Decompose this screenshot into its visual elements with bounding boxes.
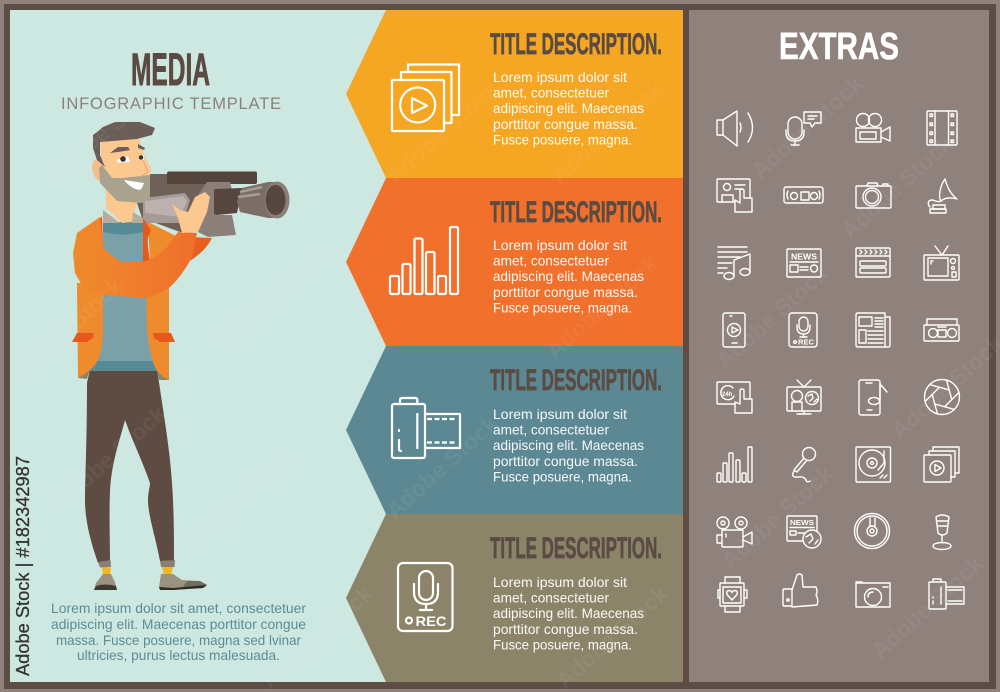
body text: Fusce posuere, magna. (493, 132, 632, 148)
body text: amet, consectetuer (493, 252, 609, 268)
arrow band (346, 346, 683, 514)
smile (124, 180, 144, 190)
icon: disc (854, 514, 890, 548)
panel: left background (10, 10, 683, 682)
illustration: cameraman (72, 122, 290, 590)
body text: porttitor congue massa. (493, 116, 638, 132)
icon: photo camera (856, 183, 891, 208)
heading: TITLE DESCRIPTION. (490, 28, 662, 61)
ear (90, 158, 106, 182)
jacket body (77, 222, 178, 380)
body text: Fusce posuere, magna. (493, 468, 632, 484)
icon: boombox (924, 319, 959, 341)
icon: film strip (927, 111, 957, 145)
watermark: Adobe Stock (716, 460, 838, 574)
watermark: Adobe Stock (256, 580, 378, 692)
panel: extras background (689, 10, 989, 682)
icon: signal bars (390, 227, 458, 294)
beard (99, 165, 150, 203)
body text: porttitor congue massa. (493, 621, 638, 637)
panel: step 4 (346, 514, 683, 682)
icon grid: extras (717, 111, 964, 612)
hair (93, 122, 155, 167)
panel: step 3 (346, 346, 683, 514)
body text: Lorem ipsum dolor sit (493, 237, 627, 253)
watermark: Adobe Stock (836, 130, 958, 244)
body text: Lorem ipsum dolor sit (493, 574, 627, 590)
icon: recorder small (789, 313, 817, 347)
body text: adipiscing elit. Maecenas (493, 100, 644, 116)
extras heading: EXTRAS (779, 26, 899, 68)
watermark: Adobe Stock (211, 240, 333, 354)
watermark: Adobe Stock (6, 272, 128, 386)
icon: tv news (787, 380, 821, 414)
watermark: Adobe Stock (176, 443, 298, 557)
head (90, 122, 155, 203)
left description text: massa. Fusce posuere, magna sed lvinar (56, 632, 301, 648)
body text: amet, consectetuer (493, 590, 609, 606)
far sleeve (188, 237, 212, 262)
icon: smartwatch (718, 577, 747, 612)
icon: world news (787, 516, 821, 548)
icon: touch presentation (717, 179, 752, 212)
icon: retro tv (924, 246, 959, 280)
icon: compact camera (856, 582, 890, 607)
arrow band (346, 10, 683, 178)
icon: gramophone (928, 179, 957, 213)
watermark: Adobe Stock (866, 550, 988, 664)
socks (102, 567, 173, 575)
watermark: Adobe Stock (541, 250, 663, 364)
watermark: Adobe Stock (711, 260, 833, 374)
icon: thumbs up (783, 574, 818, 607)
hand (172, 192, 210, 233)
nose (140, 160, 148, 177)
icon: vintage microphone (933, 515, 951, 550)
body text: Lorem ipsum dolor sit (493, 69, 627, 85)
subtitle: INFOGRAPHIC TEMPLATE (61, 95, 281, 113)
stock id label: Adobe Stock | #182342987 (12, 456, 33, 676)
left description text: adipiscing elit. Maecenas porttitor congue (51, 616, 306, 632)
face (100, 138, 151, 197)
trousers (85, 369, 174, 563)
body text: porttitor congue massa. (493, 453, 638, 469)
body text: Fusce posuere, magna. (493, 300, 632, 316)
icon: recorder small: REC (798, 340, 814, 346)
icon: world news: NEWS (790, 518, 814, 527)
body text (493, 406, 644, 484)
eyes (117, 155, 144, 162)
icon: news (787, 249, 821, 277)
panel: step 2 (346, 178, 683, 346)
icon: aperture (924, 380, 960, 414)
icon: music list (718, 247, 750, 280)
arrow band (346, 514, 683, 682)
icon: microphone with speech bubble (786, 112, 821, 145)
watermark: Adobe Stock (546, 75, 668, 189)
body text: Fusce posuere, magna. (493, 636, 632, 652)
lapels (95, 216, 151, 262)
icon: phone video (723, 313, 745, 347)
video camera (137, 172, 290, 237)
icon: recorder: REC (416, 614, 447, 629)
body text: amet, consectetuer (493, 84, 609, 100)
pocket flaps (72, 333, 175, 342)
left description text: Lorem ipsum dolor sit amet, consectetuer (51, 600, 306, 616)
icon: movie camera (856, 114, 890, 142)
icon: film roll small (929, 579, 964, 609)
body text: adipiscing elit. Maecenas (493, 437, 644, 453)
icon: recorder (398, 563, 452, 631)
panel: step 1 (346, 10, 683, 178)
icon: reel video camera (717, 517, 752, 547)
icon: hand microphone (793, 448, 816, 482)
icon: newspaper (856, 313, 890, 347)
body text (493, 574, 644, 652)
watermark: Adobe Stock (381, 410, 503, 524)
body text: Lorem ipsum dolor sit (493, 406, 627, 422)
watermark: Adobe Stock (746, 70, 868, 184)
watermark: Adobe Stock (381, 75, 503, 189)
neck (106, 190, 137, 223)
icon: 24h touch: 24h (722, 392, 733, 398)
watermark: Adobe Stock (42, 77, 169, 184)
arm (73, 217, 197, 298)
body text (493, 237, 644, 316)
icon: cassette (784, 187, 823, 203)
icon: clapperboard (856, 248, 890, 277)
shirt (90, 222, 157, 371)
icon: bars small (717, 447, 752, 482)
watermark: Adobe Stock (551, 580, 673, 692)
icon: 24h touch (717, 382, 752, 413)
icon: film roll (392, 398, 460, 458)
left description text: ultricies, purus lectus malesuada. (77, 647, 280, 663)
trouser cuffs (98, 560, 175, 568)
heading: TITLE DESCRIPTION. (490, 196, 662, 229)
icon: news: NEWS (791, 252, 817, 262)
eyebrows (110, 144, 145, 153)
icon: turntable (856, 447, 890, 482)
title: MEDIA (131, 44, 210, 95)
arrow band (346, 178, 683, 346)
heading: TITLE DESCRIPTION. (490, 364, 662, 397)
body text: adipiscing elit. Maecenas (493, 605, 644, 621)
body text: amet, consectetuer (493, 422, 609, 438)
collar (103, 210, 143, 223)
icon: media stack small (924, 447, 959, 482)
right shoe (159, 574, 207, 590)
body text (493, 69, 644, 148)
body text: adipiscing elit. Maecenas (493, 268, 644, 284)
heading: TITLE DESCRIPTION. (490, 532, 662, 565)
icon: media stack (392, 64, 459, 131)
body text: porttitor congue massa. (493, 284, 638, 300)
left shoe (94, 574, 117, 590)
icon: phone music (859, 380, 887, 415)
icon: speaker (717, 111, 752, 146)
watermark: Adobe Stock (49, 400, 171, 514)
left description text (51, 600, 306, 663)
